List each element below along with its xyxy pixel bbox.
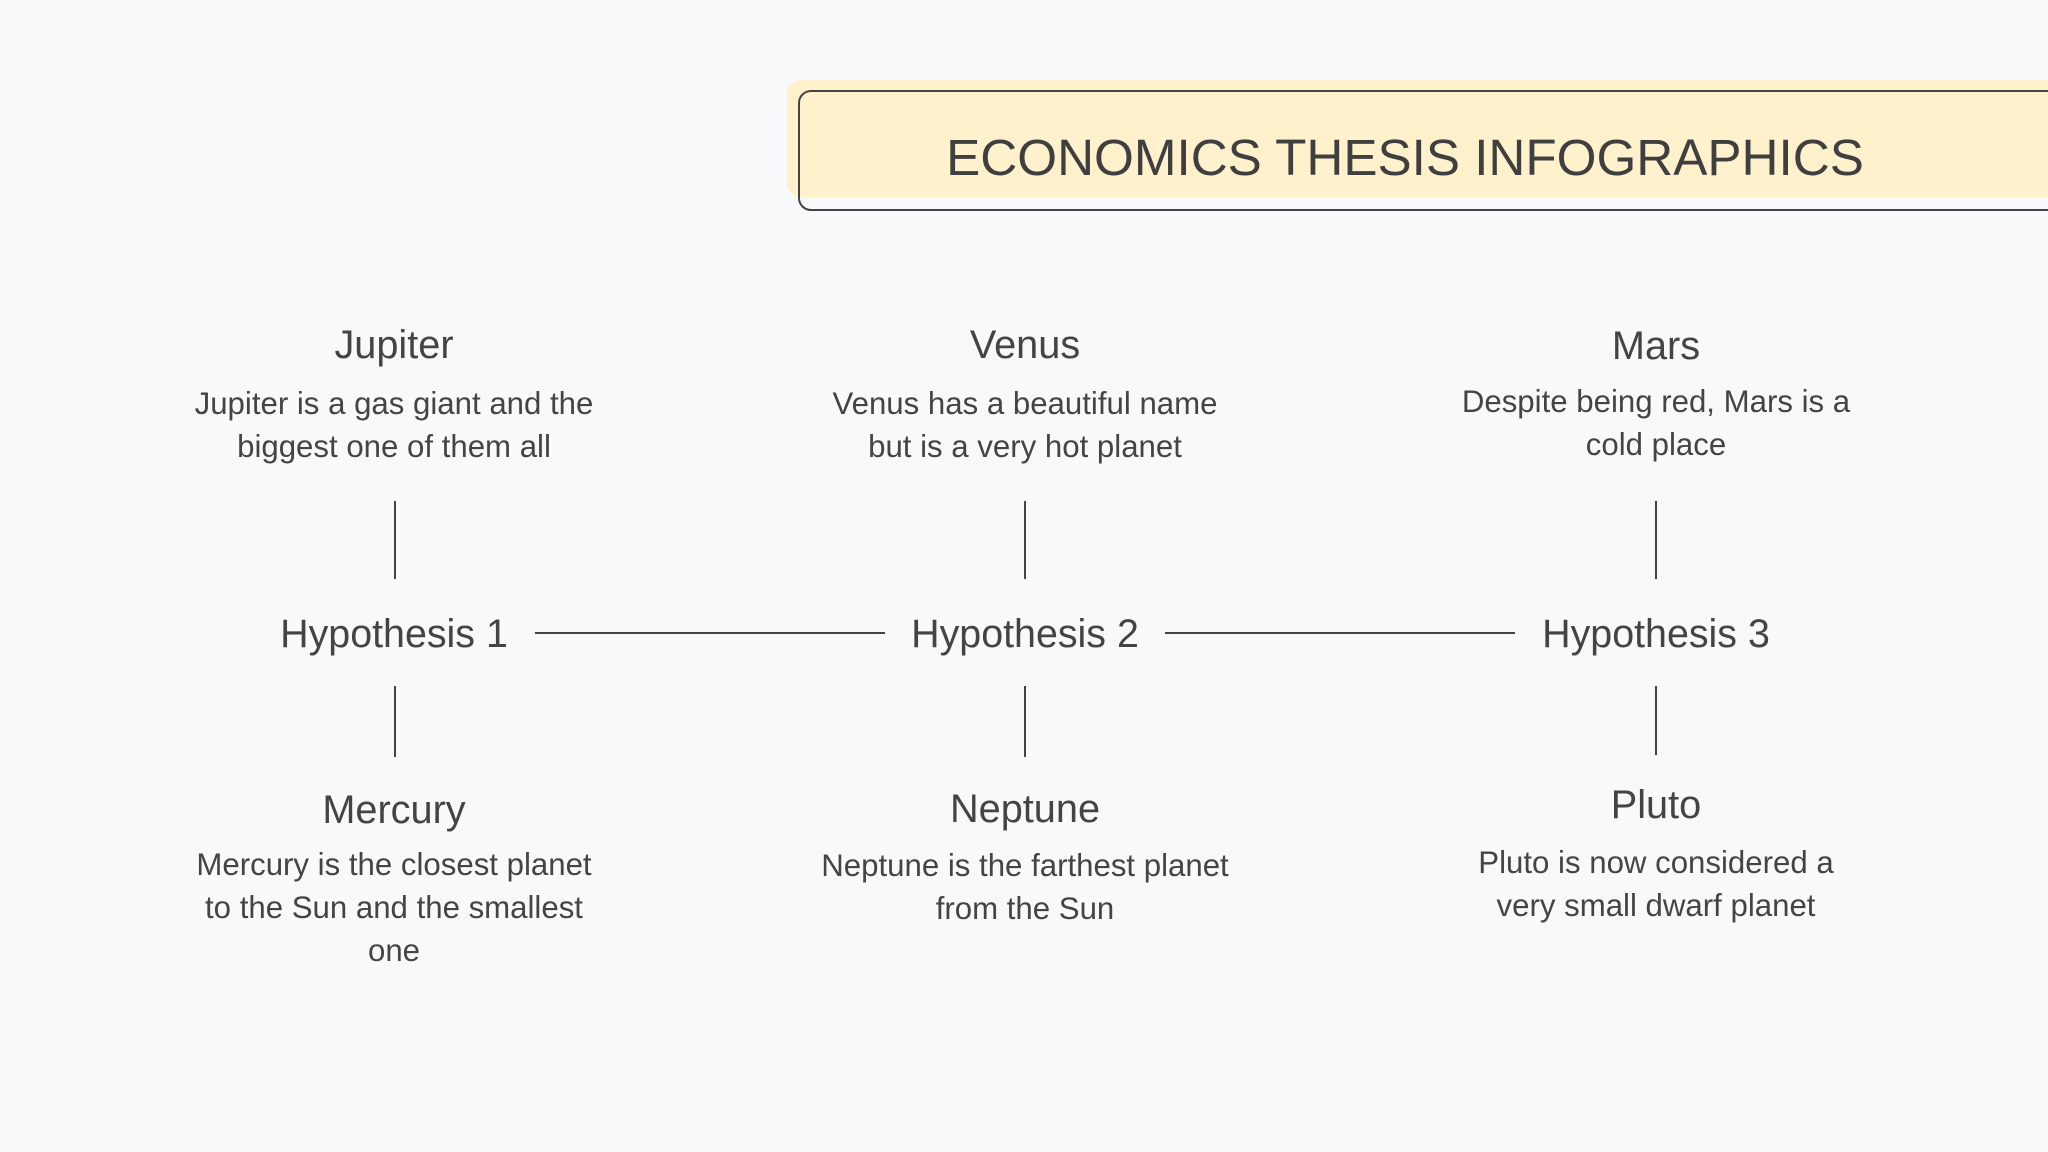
column 1: Mercury bottom: one	[368, 933, 420, 968]
column 1: Jupiter top: Jupiter is a gas giant and the	[195, 386, 593, 421]
column 1: Mercury bottom: Mercury is the closest planet	[196, 847, 592, 882]
column 2: Venus top: Venus	[970, 323, 1080, 367]
column 3: Mars top: Mars	[1612, 324, 1700, 368]
hypotheses row: Hypothesis 1	[280, 612, 508, 656]
column 3: Pluto bottom: Pluto is now considered a	[1478, 845, 1834, 880]
hypotheses row: Hypothesis 2	[911, 612, 1139, 656]
title banner	[787, 80, 2048, 210]
column 3: Mars top	[1462, 324, 1851, 462]
column 3: Mars top: Despite being red, Mars is a	[1462, 384, 1851, 419]
column 2: Neptune bottom: Neptune	[950, 787, 1100, 831]
column 1: Jupiter top: biggest one of them all	[237, 429, 551, 464]
hypotheses row	[280, 612, 1770, 656]
column 2: Venus top: Venus has a beautiful name	[833, 386, 1217, 421]
column 2: Venus top	[833, 323, 1217, 464]
column 3: Pluto bottom: Pluto	[1611, 783, 1701, 827]
column 1: Mercury bottom	[196, 788, 592, 968]
title: ECONOMICS THESIS INFOGRAPHICS	[946, 129, 1864, 186]
column 3: Pluto bottom: very small dwarf planet	[1497, 888, 1816, 923]
column 2: Neptune bottom: from the Sun	[936, 891, 1114, 926]
column 3: Pluto bottom	[1478, 783, 1834, 923]
column 2: Venus top: but is a very hot planet	[868, 429, 1182, 464]
column 1: Mercury bottom: to the Sun and the smallest	[205, 890, 583, 925]
column 2: Neptune bottom: Neptune is the farthest planet	[821, 848, 1229, 883]
column 3: Mars top: cold place	[1586, 427, 1726, 462]
column 1: Jupiter top	[195, 323, 593, 464]
column 1: Jupiter top: Jupiter	[334, 323, 454, 367]
column 1: Mercury bottom: Mercury	[322, 788, 466, 832]
connector lines	[395, 501, 1656, 757]
column 2: Neptune bottom	[821, 787, 1229, 926]
hypotheses row: Hypothesis 3	[1542, 612, 1770, 656]
